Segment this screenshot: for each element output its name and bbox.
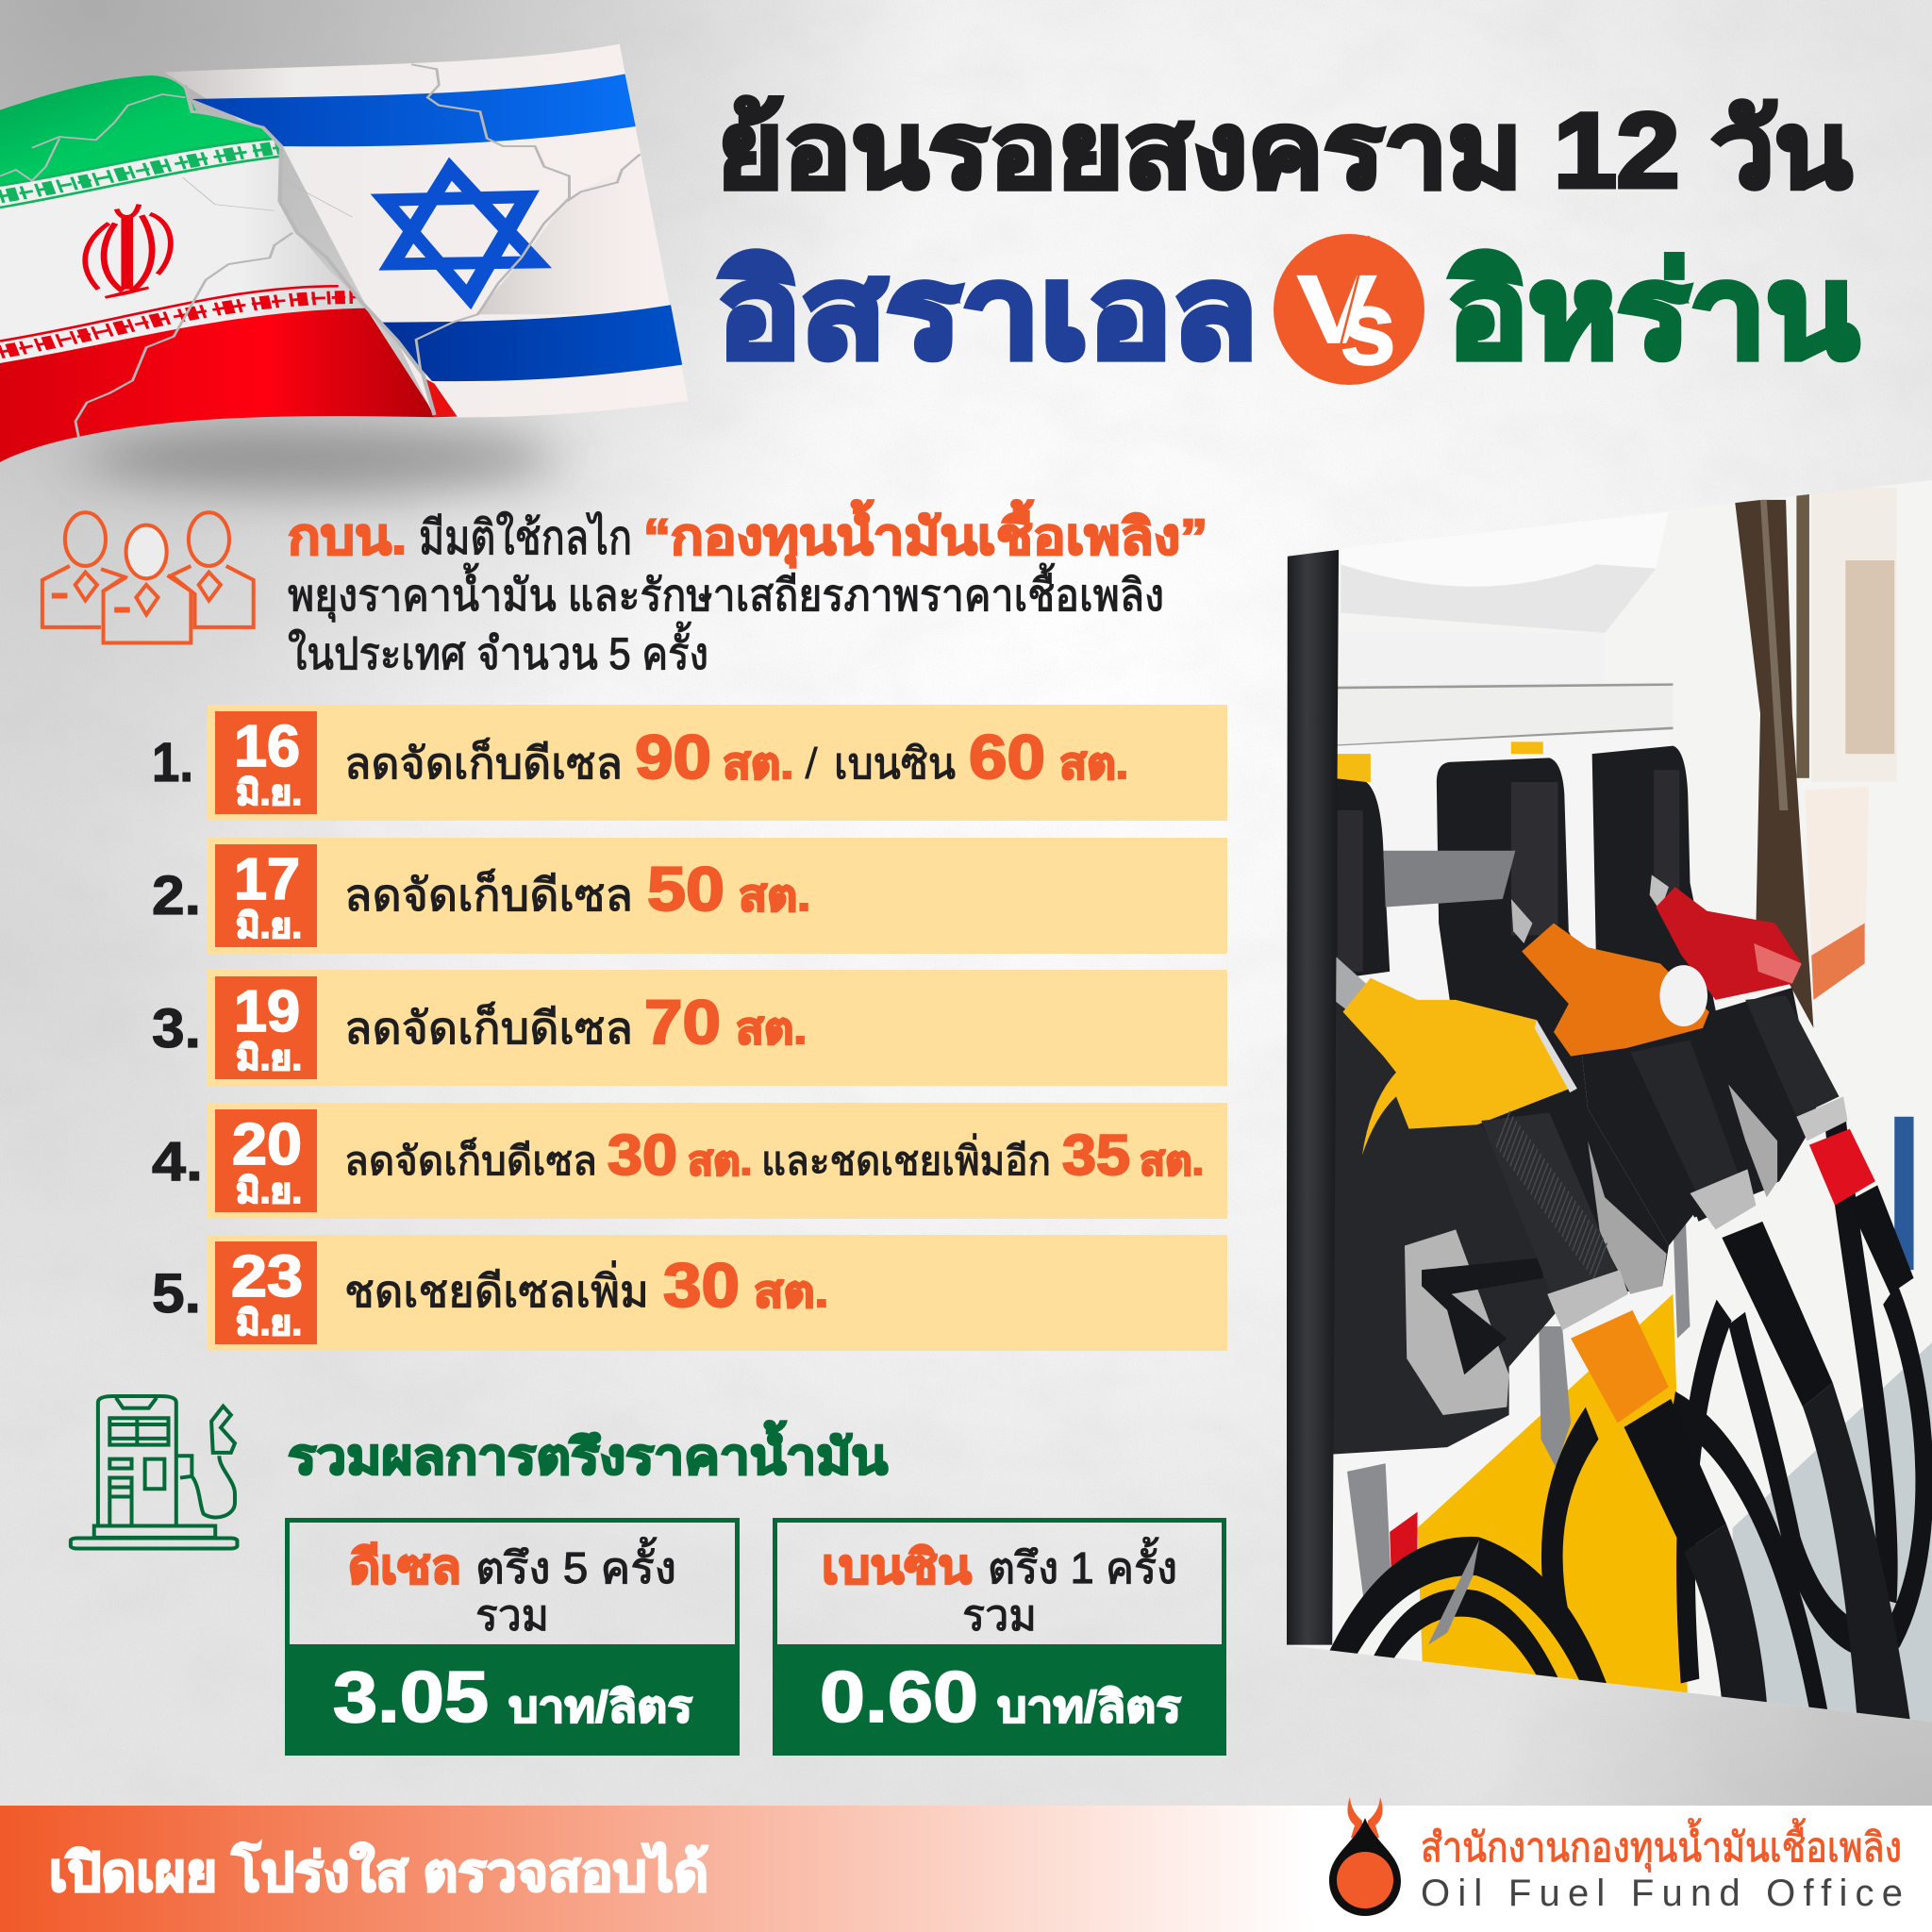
heading: Israel: อิสราเอล bbox=[717, 241, 1257, 384]
footer band bbox=[0, 1806, 1932, 1932]
row 1: 16 June: มิ.ย. bbox=[236, 774, 302, 812]
row 4: 20 June: 35 bbox=[1062, 1124, 1130, 1187]
icon: Iran emblem bbox=[85, 205, 171, 297]
heading: price freeze summary: รวมผลการตรึงราคาน้ำมัน bbox=[288, 1421, 888, 1485]
VS badge: s bbox=[1340, 269, 1396, 387]
panel: gasoline total: รวม bbox=[962, 1591, 1037, 1640]
row 4: 20 June: มิ.ย. bbox=[236, 1172, 302, 1210]
row 5: 23 June: 23 bbox=[231, 1244, 303, 1309]
panel: diesel total bbox=[285, 1521, 740, 1756]
row 1: 16 June: 60 bbox=[969, 722, 1045, 791]
row 4: 20 June: และชดเชยเพิ่มอีก bbox=[761, 1134, 1051, 1183]
logo: Oil Fuel Fund Office: Oil Fuel Fund Office bbox=[1421, 1873, 1903, 1914]
row 3: 19 June: มิ.ย. bbox=[236, 1039, 302, 1077]
row 1: 16 June: เบนซิน bbox=[834, 739, 956, 788]
panel: gasoline total: เบนซิน bbox=[822, 1541, 972, 1593]
row 1: 16 June: สต. bbox=[1059, 739, 1128, 788]
row 3: 19 June: 70 bbox=[644, 987, 721, 1057]
heading: Iran: อิหร่าน bbox=[1447, 241, 1858, 384]
row 2: 17 June: 50 bbox=[647, 854, 724, 924]
cracks across the flags bbox=[0, 64, 641, 437]
row 2: 17 June: มิ.ย. bbox=[236, 907, 302, 945]
row 4: 20 June: สต. bbox=[1140, 1139, 1204, 1183]
row 4: 20 June bbox=[152, 1103, 1227, 1219]
photo: fuel pump nozzles bbox=[1264, 472, 1932, 1762]
row 5: 23 June: สต. bbox=[754, 1267, 828, 1316]
row 2: 17 June: 2. bbox=[152, 865, 201, 926]
intro text block bbox=[288, 500, 1208, 678]
row 2: 17 June: ลดจัดเก็บดีเซล bbox=[344, 868, 633, 920]
row 3: 19 June: 3. bbox=[152, 998, 201, 1059]
row 1: 16 June: สต. bbox=[723, 739, 793, 788]
panel: gasoline total: 0.60 bbox=[820, 1657, 978, 1738]
row 1: 16 June: 90 bbox=[635, 722, 711, 791]
row 5: 23 June: 30 bbox=[663, 1250, 740, 1320]
panel: diesel total: รวม bbox=[475, 1591, 549, 1640]
title: ย้อนรอยสงคราม 12 วัน bbox=[717, 92, 1852, 209]
row 5: 23 June bbox=[152, 1235, 1227, 1351]
row 1: 16 June: 1. bbox=[152, 732, 193, 793]
icon: fuel pump bbox=[71, 1396, 237, 1548]
panel: diesel total: ดีเซล bbox=[348, 1541, 461, 1593]
VS badge bbox=[1274, 234, 1424, 387]
row 5: 23 June: 5. bbox=[152, 1263, 201, 1324]
row 1: 16 June: 16 bbox=[234, 714, 300, 779]
row 4: 20 June: 30 bbox=[608, 1124, 677, 1187]
row 2: 17 June: สต. bbox=[739, 871, 810, 920]
row 3: 19 June bbox=[152, 970, 1227, 1086]
row 3: 19 June: สต. bbox=[736, 1004, 807, 1053]
panel: diesel total: 3.05 bbox=[333, 1657, 489, 1738]
row 1: 16 June bbox=[152, 705, 1227, 821]
row 4: 20 June: สต. bbox=[688, 1139, 752, 1183]
intro text block: “กองทุนน้ำมันเชื้อเพลิง” bbox=[643, 500, 1208, 568]
row 3: 19 June: 19 bbox=[234, 979, 300, 1044]
row 4: 20 June: ลดจัดเก็บดีเซล bbox=[344, 1138, 597, 1183]
row 2: 17 June: 17 bbox=[234, 847, 300, 912]
panel: diesel total: ตรึง 5 ครั้ง bbox=[475, 1537, 676, 1592]
title bbox=[717, 92, 1852, 384]
panel: diesel total: บาท/ลิตร bbox=[508, 1682, 692, 1731]
row 5: 23 June: มิ.ย. bbox=[236, 1304, 302, 1342]
intro text block: กบน. bbox=[288, 509, 407, 565]
panel: gasoline total: ตรึง 1 ครั้ง bbox=[988, 1537, 1177, 1592]
footer slogan: เปิดเผย โปร่งใส ตรวจสอบได้ bbox=[49, 1841, 708, 1902]
illustration: cracked Iran and Israel flags bbox=[0, 44, 688, 493]
row 4: 20 June: 4. bbox=[152, 1131, 203, 1192]
logo: Oil Fuel Fund Office bbox=[1329, 1797, 1903, 1916]
icon: committee people bbox=[42, 512, 254, 643]
row 4: 20 June: 20 bbox=[232, 1112, 302, 1177]
panel: gasoline total: บาท/ลิตร bbox=[997, 1682, 1181, 1731]
row 1: 16 June: ลดจัดเก็บดีเซล bbox=[344, 738, 623, 788]
panel: gasoline total bbox=[773, 1521, 1226, 1756]
intro text block: ในประเทศ จำนวน 5 ครั้ง bbox=[288, 622, 708, 678]
VS badge: V bbox=[1297, 256, 1376, 363]
row 5: 23 June: ชดเชยดีเซลเพิ่ม bbox=[344, 1260, 649, 1316]
row 2: 17 June bbox=[152, 838, 1227, 954]
row 3: 19 June: ลดจัดเก็บดีเซล bbox=[344, 1001, 633, 1053]
row 1: 16 June: / bbox=[805, 739, 818, 788]
intro text block: พยุงราคาน้ำมัน และรักษาเสถียรภาพราคาเชื้อเพลิง bbox=[288, 563, 1164, 623]
intro text block: มีมติใช้กลไก bbox=[419, 511, 632, 564]
